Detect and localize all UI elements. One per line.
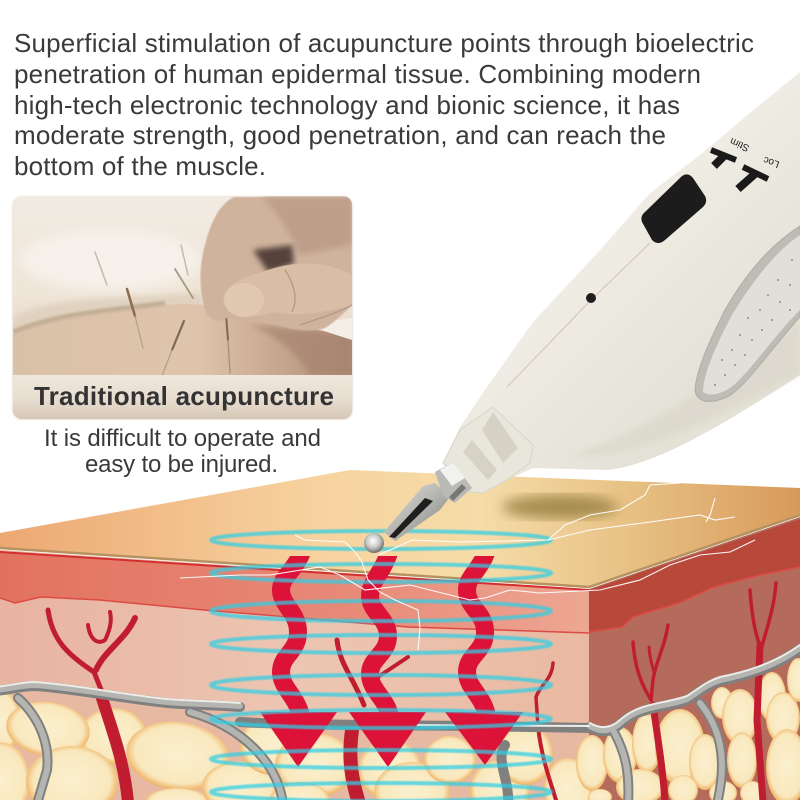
panel: traditional acupuncture: [13, 196, 352, 419]
metal probe: [364, 462, 472, 553]
cyan energy rings: [211, 531, 551, 800]
gray membrane: [0, 642, 800, 800]
fat layer side: [576, 658, 800, 800]
warning text: It is difficult to operate and: [44, 425, 321, 452]
switch labels: Loc: [762, 154, 781, 170]
arrow 2: [349, 545, 426, 767]
collar: [443, 407, 533, 493]
skin top surface: [0, 470, 800, 587]
intro paragraph: Superficial stimulation of acupuncture points through bioelectric: [14, 28, 754, 58]
caption strip: [13, 375, 352, 419]
black slide switch: [641, 174, 706, 243]
acupuncture pen: [364, 72, 800, 553]
pen shading: [570, 320, 800, 456]
intro paragraph: penetration of human epidermal tissue. Combining modern: [14, 59, 701, 89]
warning text: easy to be injured.: [85, 451, 278, 478]
heat arrows: [260, 545, 523, 767]
indicator light: [586, 293, 596, 303]
intro paragraph: [14, 28, 754, 181]
skin block diagram: [0, 470, 800, 800]
arrow 1: [260, 545, 337, 767]
pen body: [443, 72, 800, 493]
arrow 3: [445, 545, 523, 765]
warning text: [44, 425, 321, 478]
photo: needles in back: [13, 196, 352, 376]
fat layer front: [0, 687, 592, 800]
blood vessels: [48, 583, 776, 800]
caption: Traditional acupuncture: [34, 381, 334, 411]
front tissue layers: [0, 550, 589, 800]
hand: [200, 197, 352, 330]
intro paragraph: high-tech electronic technology and bionic science, it has: [14, 90, 680, 120]
intro paragraph: moderate strength, good penetration, and can reach the: [14, 120, 666, 150]
side grip: [695, 226, 800, 401]
switch labels: [711, 135, 781, 189]
lightning bolts: [180, 483, 755, 650]
needles: [95, 245, 230, 376]
seam line: [507, 243, 650, 387]
switch labels: Stim: [728, 135, 751, 153]
side tissue layers: [589, 517, 800, 800]
intro paragraph: bottom of the muscle.: [14, 151, 266, 181]
